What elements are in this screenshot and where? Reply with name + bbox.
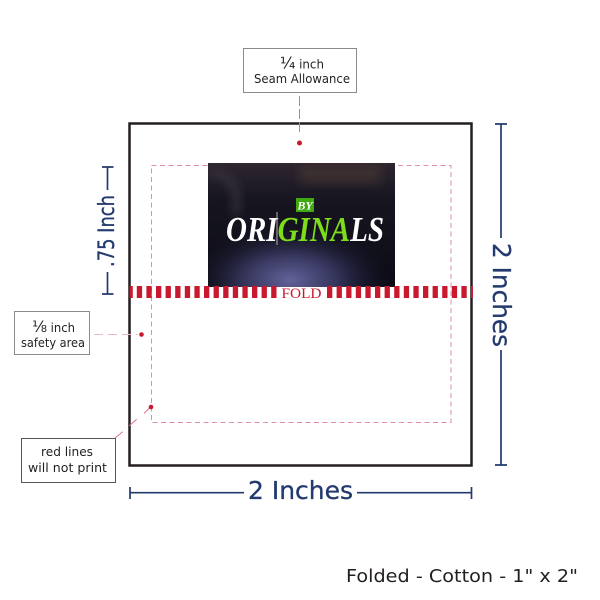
callout: safety area: safety area [21, 336, 85, 350]
dimension: 2 inches horizontal [130, 476, 472, 505]
callout: seam allowance [244, 48, 356, 92]
fold line stripes [130, 286, 473, 298]
dimension: .75 inch [95, 167, 120, 294]
callout: safety area: ⅛ inch [32, 317, 75, 336]
red lines leader [115, 405, 153, 438]
callout: red lines: red lines [41, 445, 93, 459]
dimension: 2 inches horizontal: 2 Inches [248, 476, 353, 505]
callout: safety area [14, 312, 90, 354]
logo wordmark: ORIGINALS: ORIGINALS [226, 210, 384, 249]
seam allowance leader line [297, 96, 302, 146]
logo image [208, 163, 395, 287]
safety area leader line [94, 332, 144, 337]
callout: red lines [22, 438, 116, 482]
safety area dashed outline [152, 166, 451, 422]
callout: red lines: will not print [28, 461, 107, 475]
dimension: 2 inches vertical: 2 Inches [487, 243, 516, 347]
product caption: Folded - Cotton - 1" x 2" [346, 566, 578, 587]
callout: seam allowance: ¼ inch [280, 54, 324, 72]
outer patch outline [130, 124, 472, 466]
dimension: 2 inches vertical [487, 124, 516, 465]
fold label: FOLD [282, 286, 322, 302]
dimension: .75 inch: .75 Inch [95, 195, 120, 267]
logo badge: BY: BY [296, 198, 314, 212]
callout: seam allowance: Seam Allowance [254, 72, 350, 86]
cursor line in logo [276, 212, 278, 245]
